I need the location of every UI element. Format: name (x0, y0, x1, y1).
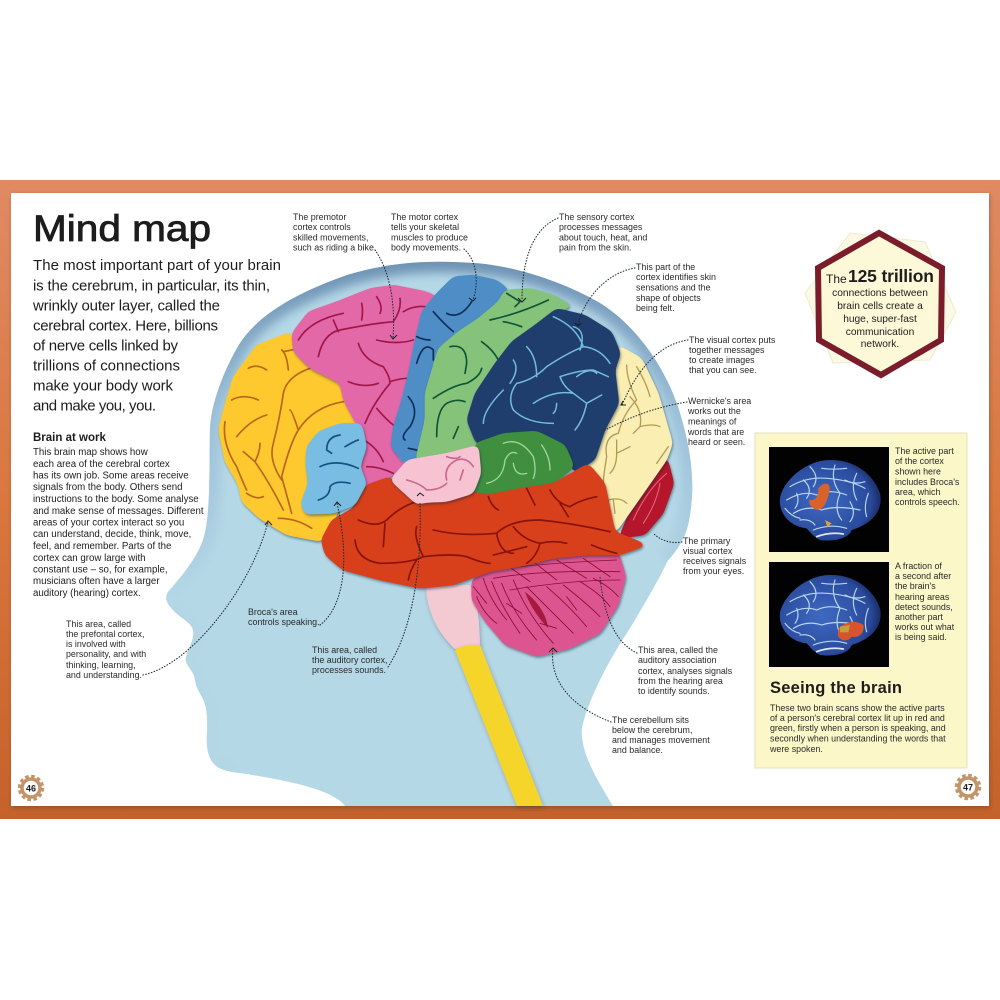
label: primary visual cortex (683, 536, 747, 576)
label: sensory cortex: processes messages (559, 222, 643, 232)
head silhouette (150, 255, 710, 806)
label: visual cortex: The visual cortex puts (689, 335, 776, 345)
label: prefrontal cortex: This area, called (66, 619, 131, 629)
label: premotor cortex (293, 212, 376, 252)
label: sensory cortex: about touch, heat, and (559, 232, 647, 242)
intro paragraph: The most important part of your brain (33, 257, 281, 274)
page number 46 gear: 46 (26, 784, 36, 794)
label: skin sensations (636, 262, 716, 313)
label: premotor cortex: cortex controls (293, 222, 351, 232)
panel body text: were spoken. (769, 744, 823, 754)
label: auditory association cortex: from the hearing area (638, 676, 723, 686)
callout arrowheads (265, 298, 626, 652)
body text: Brain at work: signals from the body. Others send (33, 482, 183, 493)
navy somatosensory association cortex (467, 308, 621, 473)
panel body text: secondly when understanding the words that (770, 734, 946, 744)
body text: Brain at work: and make sense of messages. Different (33, 506, 204, 517)
hexagon callout: The (826, 272, 847, 286)
intro paragraph: is the cerebrum, in particular, its thin, (33, 278, 270, 295)
label: prefrontal cortex: the prefontal cortex, (66, 629, 144, 639)
label: Broca's area (248, 607, 320, 627)
brain scan 2: understanding (769, 562, 889, 667)
label: prefrontal cortex: personality, and with (66, 649, 146, 659)
label: prefrontal cortex: and understanding. (66, 670, 142, 680)
panel body text: of a person's cerebral cortex lit up in red and (770, 713, 945, 723)
label: skin sensations: sensations and the (636, 282, 711, 292)
orange page border (0, 180, 1000, 819)
page number 47 gear: 47 (963, 782, 973, 792)
hexagon callout (805, 233, 956, 375)
label: Wernicke's area: words that are (687, 427, 744, 437)
body text: Brain at work: musicians often have a larger (33, 576, 160, 587)
label: motor cortex: The motor cortex (391, 212, 459, 222)
label: auditory association cortex: auditory association (638, 655, 717, 665)
label: primary visual cortex: The primary (683, 536, 731, 546)
label: Wernicke's area: Wernicke's area (688, 396, 751, 406)
intro paragraph: wrinkly outer layer, called the (32, 298, 220, 315)
brain scan 1: speaking (769, 447, 889, 552)
intro paragraph: of nerve cells linked by (33, 338, 178, 355)
yellow prefrontal cortex (218, 332, 367, 542)
label: cerebellum (612, 715, 710, 755)
label: visual cortex (689, 335, 776, 375)
heading: Seeing the brain: Seeing the brain (770, 679, 902, 697)
scan 1 caption: includes Broca's (895, 477, 960, 487)
page number 47 gear (956, 776, 980, 798)
brainstem (426, 585, 480, 649)
label: primary visual cortex: from your eyes. (683, 566, 744, 576)
sky blue Broca's area (301, 423, 367, 514)
scan 2 caption: another part (895, 612, 943, 622)
cerebellum (472, 552, 626, 657)
body text: Brain at work: each area of the cerebral cortex (33, 459, 170, 470)
intro paragraph: make your body work (33, 378, 174, 395)
dotted callout lines (143, 218, 688, 722)
label: cerebellum: and manages movement (612, 735, 710, 745)
green sensory cortex (415, 288, 574, 462)
label: auditory association cortex: This area, called the (638, 645, 718, 655)
page number 46 gear (20, 776, 42, 800)
brain illustration (218, 275, 674, 657)
scan 1 caption: controls speech. (895, 497, 960, 507)
body text: Brain at work: can understand, decide, think, move, (33, 529, 191, 540)
label: sensory cortex: The sensory cortex (559, 212, 635, 222)
label: motor cortex: tells your skeletal (391, 222, 459, 232)
scan 2 caption (894, 561, 955, 642)
scan 2 caption: works out what (894, 622, 955, 632)
panel body text (769, 703, 946, 754)
body text: Brain at work: has its own job. Some areas receive (33, 470, 189, 482)
label: visual cortex: to create images (689, 355, 755, 365)
label: cerebellum: below the cerebrum, (612, 725, 692, 735)
label: skin sensations: being felt. (636, 303, 674, 313)
label: skin sensations: shape of objects (636, 293, 701, 303)
label: auditory association cortex: cortex, analyses signals (638, 666, 733, 676)
label: sensory cortex (559, 212, 647, 252)
label: skin sensations: cortex identifies skin (636, 272, 716, 282)
label: primary visual cortex: receives signals (683, 556, 747, 566)
scan 1 caption: of the cortex (895, 456, 944, 466)
white book page (11, 193, 989, 806)
intro paragraph: trillions of connections (33, 358, 180, 375)
body text: Brain at work: feel, and remember. Parts of the (33, 541, 171, 552)
scan 1 caption: shown here (895, 466, 941, 476)
label: skin sensations: This part of the (636, 262, 695, 272)
label: auditory cortex: processes sounds. (312, 665, 386, 675)
spinal cord (455, 645, 543, 806)
label: primary visual cortex: visual cortex (683, 546, 733, 556)
hexagon callout: connections between (832, 288, 928, 299)
label: Broca's area: controls speaking. (248, 617, 320, 627)
body text: Brain at work (33, 447, 204, 599)
label: premotor cortex: skilled movements, (293, 232, 368, 242)
label: auditory association cortex (638, 645, 733, 696)
label: motor cortex: muscles to produce (391, 232, 468, 242)
cream visual cortex (585, 345, 673, 535)
light pink patch (390, 445, 481, 504)
panel: seeing the brain (755, 433, 967, 768)
scan 2 caption: hearing areas (895, 592, 950, 602)
intro paragraph: and make you, you. (33, 398, 156, 415)
label: prefrontal cortex: is involved with (66, 639, 126, 649)
scan 2 caption: A fraction of (895, 561, 942, 571)
dark green Wernicke's area (469, 431, 574, 497)
scan 1 caption: area, which (895, 487, 940, 497)
label: sensory cortex: pain from the skin. (559, 242, 632, 252)
intro paragraph (32, 257, 281, 415)
label: Wernicke's area (687, 396, 751, 447)
pink premotor cortex (292, 285, 443, 488)
panel body text: These two brain scans show the active parts (770, 703, 945, 713)
hexagon callout: network. (861, 339, 899, 350)
scan 1 caption: The active part (895, 446, 954, 456)
dark red primary visual cortex (618, 455, 674, 538)
panel body text: green, firstly when a person is speaking, and (770, 723, 946, 733)
label: visual cortex: that you can see. (689, 365, 757, 375)
label: auditory association cortex: to identify sounds. (638, 686, 710, 696)
body text: Brain at work: areas of your cortex interact so you (33, 518, 184, 528)
hexagon callout: huge, super-fast (843, 314, 917, 325)
label: premotor cortex: such as riding a bike. (293, 242, 376, 252)
label: visual cortex: together messages (689, 345, 765, 355)
label: Broca's area: Broca's area (248, 607, 298, 617)
scan 2 caption: is being said. (895, 632, 947, 642)
body text: Brain at work: cortex can grow large with (33, 553, 146, 564)
hexagon callout: communication (846, 327, 914, 338)
body text: Brain at work: constant use – so, for example, (33, 564, 168, 576)
body text: Brain at work: instructions to the body. Some analyse (33, 494, 199, 505)
scan 2 caption: the brain's (895, 581, 936, 591)
label: motor cortex (391, 212, 468, 252)
label: motor cortex: body movements. (391, 242, 461, 252)
red auditory cortex (321, 463, 648, 588)
label: prefrontal cortex (66, 619, 146, 680)
blue motor cortex (391, 275, 509, 464)
label: auditory cortex: This area, called (312, 645, 377, 655)
label: cerebellum: and balance. (612, 745, 663, 755)
label: Wernicke's area: works out the (687, 406, 741, 416)
label: auditory cortex: the auditory cortex, (312, 655, 387, 665)
sub-heading: Brain at work: Brain at work (33, 432, 106, 444)
body text: Brain at work: This brain map shows how (33, 447, 149, 458)
hexagon callout: brain cells create a (837, 301, 923, 312)
scan 2 caption: a second after (895, 571, 951, 581)
hexagon callout: 125 trillion (848, 266, 934, 286)
label: Wernicke's area: heard or seen. (688, 437, 745, 447)
intro paragraph: cerebral cortex. Here, billions (33, 318, 218, 335)
scan 2 caption: detect sounds, (895, 602, 953, 612)
label: prefrontal cortex: thinking, learning, (66, 660, 136, 670)
label: auditory cortex (312, 645, 387, 675)
body text: Brain at work: auditory (hearing) cortex. (33, 588, 141, 599)
label: premotor cortex: The premotor (293, 212, 346, 222)
label: Wernicke's area: meanings of (688, 416, 737, 426)
scan 1 caption (895, 446, 960, 507)
title: Mind map (33, 208, 211, 249)
label: cerebellum: The cerebellum sits (612, 715, 690, 725)
